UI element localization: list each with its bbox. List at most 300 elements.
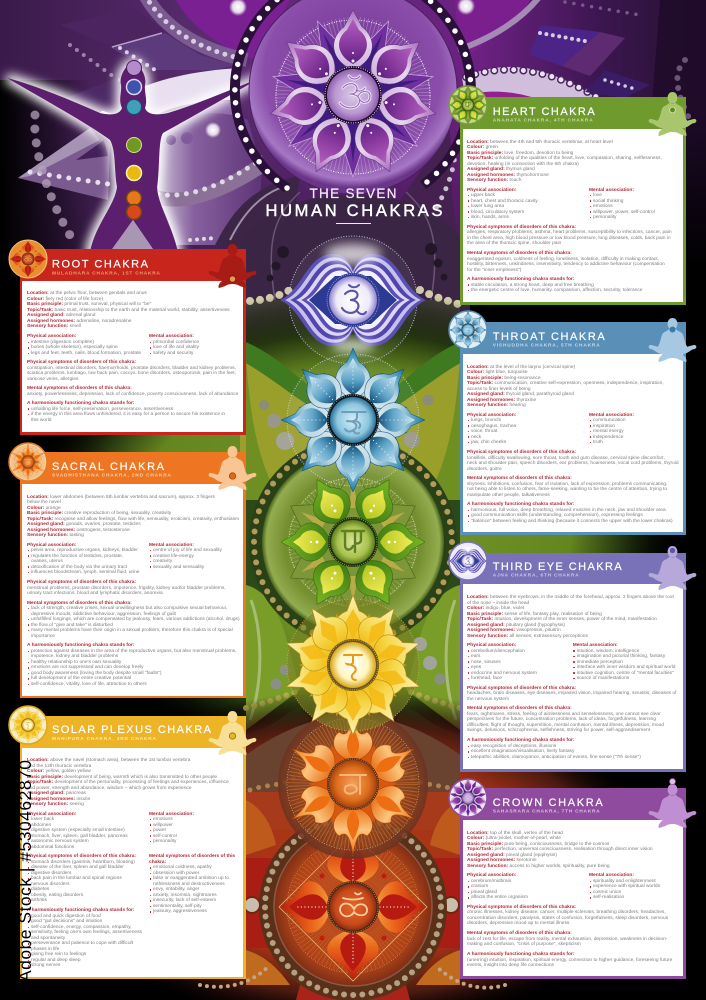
text: third eye mental symptoms: difficulties, flight of thought, superstition, mental confusion, mental illness, depression, mood [467, 723, 664, 728]
text: third eye facts: Assigned gland: pituitary gland (hypophysis) [467, 622, 565, 628]
text: throat facts: Sensory function: hearing [467, 403, 526, 408]
text: solar plexus mental symptoms: emotional coldness, apathy [153, 865, 212, 870]
text: third eye physical association [467, 642, 537, 681]
text: third eye facts: Topic/Task: intuition, development of the inner senses, power of the mind, manifestation [467, 617, 657, 622]
text: crown harmonious function [467, 952, 672, 968]
text: sacral mental association [149, 542, 222, 570]
text: solar plexus mental symptoms: Mental symptoms of disorders of this [149, 854, 235, 859]
text: solar plexus mental association: power [153, 828, 166, 833]
text: third eye facts: Sensory function: all senses, extrasensory perceptions [467, 634, 588, 638]
text: solar plexus mental association: self-control [153, 834, 177, 838]
text: solar plexus facts: and power, strength and abundance, wisdom – which grows from experience [27, 786, 192, 790]
text: root physical symptoms: constipation, intestinal disorders, haemorrhoids, prostate disorders, bladder and kidney problems, [27, 366, 236, 370]
figure with seven chakras and arms raised [7, 60, 260, 252]
text: heart physical symptoms: Physical symptoms of disorders of this chakra: [467, 224, 576, 230]
text: root physical association: bones (whole skeleton), especially spine [31, 345, 118, 350]
text: sacral mental symptoms: importance [31, 634, 55, 638]
text: heart physical symptoms: the area of the thoracic spine, shoulder pain [467, 241, 561, 246]
text: root mental association: safety and security [153, 351, 193, 356]
text: solar plexus facts: Colour: yellow, golden yellow [27, 769, 91, 774]
text: crown harmonious function: events, insight into deep life connections [467, 963, 554, 968]
text: third eye facts [467, 594, 674, 638]
text: throat harmonious function [467, 502, 673, 524]
text: heart facts: Basic principle: love, freedom, devotion to being [467, 150, 573, 156]
text: sacral physical association [27, 542, 140, 575]
text: heart mental symptoms: Mental symptoms of disorders of this chakra: [467, 251, 572, 256]
panel: root chakra [20, 249, 246, 435]
text: heart physical association: lower lung area [471, 204, 504, 209]
panel: crown chakra [460, 788, 686, 979]
text: sacral facts: Topic/Task: recognise and allow feelings, flow with life, sensuality, eroticism, creativity, enthusiasm [27, 516, 239, 522]
text: heart facts: Assigned gland: thymus gland [467, 167, 535, 172]
panel: heart chakra [460, 97, 686, 305]
icon: heart medallion [449, 86, 487, 124]
subheading: root: MULADHARA CHAKRA, 1ST CHAKRA [52, 270, 161, 276]
text: solar plexus harmonious function: phases in life [31, 947, 59, 952]
text: sacral mental symptoms [27, 600, 240, 638]
text: root facts: Topic/Task: basic trust, relationship to the earth and the material world, stability, assertiveness [27, 308, 230, 313]
text: root physical association: legs and feet, teeth, nails, blood formation, prostate [31, 351, 141, 356]
text: heart harmonious function: stable circulation, a strong heart, deep and free breathing [471, 282, 594, 288]
text: heart physical association: blood, circulatory system [471, 210, 524, 214]
panel: third eye chakra [460, 553, 686, 772]
text: heart physical association: heart, chest and thoracic cavity [471, 198, 538, 204]
panel body [463, 820, 683, 976]
text: third eye physical association: nose, sinuses [471, 660, 501, 664]
heading: sacral: SACRAL CHAKRA [52, 461, 165, 473]
text: throat mental association: independence [593, 434, 623, 440]
text: throat mental symptoms: manipulate other people, talkativeness [467, 493, 550, 498]
text: crown facts: Topic/Task: perfection, universal consciousness, realisation through direct inner vision [467, 847, 653, 852]
text: root harmonious function: if the energy in this area flows unhindered, it is easy for a person to secure his existence in [31, 412, 225, 417]
text: heart facts: Assigned hormones: thymohormone [467, 172, 549, 178]
text: root facts: Location: at the pelvic floor, between genitals and anus [27, 291, 147, 296]
text: solar plexus physical symptoms: Physical symptoms of disorders of this chakra: [27, 854, 136, 859]
text: sacral facts [27, 494, 239, 538]
text: third eye harmonious function: telepathic abilities, clairvoyance, anticipation of events, fine sense ("7th sense") [471, 755, 641, 760]
text: crown harmonious function: (unerring) intuition, inspiration, spiritual energy, connection to higher guidance, foreseeing future [467, 958, 672, 962]
text: root physical symptoms: sciatica problems, lumbago, low back pain, coccyx, bone disorders, osteoporosis, pain in the feet, [27, 371, 236, 376]
text: solar plexus physical association: Physical association: [27, 812, 76, 816]
panel: throat chakra [460, 322, 686, 535]
background: green leaf field [23, 290, 683, 760]
text: crown mental symptoms: making and confusion, "crisis of purpose", skepticism [467, 942, 581, 947]
text: solar plexus harmonious function: sensitivity, feeling one's own feelings, assertiveness [31, 930, 142, 935]
text: heart mental association: love [593, 193, 602, 198]
text: solar plexus facts: Basic principle: development of being, warmth which is also transmitted to other people [27, 774, 217, 780]
text: heart physical association [467, 188, 538, 220]
text: crown harmonious function: A harmoniously functioning chakra stands for: [467, 952, 574, 957]
text: sacral harmonious function: impotence, kidney and bladder problems [31, 654, 118, 659]
text: crown facts: Basic principle: pure being, consciousness, bridge to the cosmos [467, 842, 609, 846]
icon: meditating figure [209, 446, 256, 490]
text: solar plexus physical symptoms: back pain in the lumbar and spinal regions [31, 876, 122, 881]
text: sacral facts: Assigned hormones: oestrogens, testosterone [27, 528, 130, 532]
text: crown mental association: Mental association: [589, 873, 634, 878]
background: top-right ribbons, plates and beads [400, 0, 690, 250]
text: solar plexus mental symptoms: jealousy, aggressiveness [153, 909, 207, 914]
text: sacral mental association: sexuality and sensuality [153, 564, 204, 570]
text: sacral physical association: regulates the function of testicles, prostate, [31, 554, 123, 558]
text: throat harmonious function: A harmoniously functioning chakra stands for: [467, 502, 574, 507]
text: throat physical symptoms: disorders, goitre [467, 466, 502, 472]
text: root facts: Basic principle: primal trust, survival, physical will to "be" [27, 302, 151, 307]
text: third eye mental association: intuition, wisdom, intelligence [577, 648, 639, 654]
text: solar plexus harmonious function [27, 908, 142, 968]
text: solar plexus harmonious function: perseverance and patience to cope with difficult [31, 941, 133, 946]
text: sacral harmonious function: good body awareness (loving the body despite small "faults") [31, 671, 162, 676]
text: throat harmonious function: harmonious, full voice, deep breathing, relaxed muscles in the neck, jaw and shoulder area [471, 508, 666, 513]
icon: meditating figure [649, 778, 696, 828]
chakra: heart [249, 438, 457, 646]
subheading: throat: VISHUDDHA CHAKRA, 5TH CHAKRA [493, 343, 600, 349]
text: crown physical association: cerebrum/midbrain [471, 879, 511, 884]
panel header: medallion, title, figure [448, 310, 696, 362]
text: root mental association: primordial confidence [153, 340, 199, 345]
text: solar plexus physical symptoms [27, 854, 136, 903]
text: sacral mental symptoms: the flow of "give and take" is disturbed [31, 622, 113, 628]
text: crown physical symptoms: chronic illnesses, kidney disease, cancer, multiple sclerosis, breathing disorders, headaches, [467, 910, 666, 915]
text: heart mental symptoms [467, 250, 665, 272]
text: third eye mental symptoms: fears, nightmares, stress, feeling of aimlessness and senselessness, one cannot see clear [467, 712, 661, 717]
text: crown physical association: affects the entire organism [471, 895, 528, 900]
text: root physical association: intestine (digestion complete) [31, 340, 94, 345]
text: solar plexus harmonious function: self-confidence, energy, compassion, empathy, [31, 925, 132, 930]
text: third eye physical association: endocrine and nervous system [471, 670, 537, 676]
text: sacral physical symptoms: Physical symptoms of disorders of this chakra: [27, 580, 136, 585]
panel: solar plexus chakra [20, 716, 246, 979]
text: solar plexus physical symptoms: disease of the liver, spleen and gall bladder [31, 865, 124, 870]
text: solar plexus mental symptoms: insecurity, lack of self-esteem [153, 898, 216, 903]
text: solar plexus mental association: emotions [153, 817, 173, 822]
text: solar plexus physical association: stomach, liver, spleen, gall bladder, pancreas [31, 834, 128, 838]
icon: sacral medallion [9, 443, 47, 481]
text: heart mental association: emotions [593, 204, 613, 209]
text: third eye mental association [573, 642, 676, 681]
text: solar plexus physical symptoms: obesity, eating disorders [31, 893, 83, 898]
text: crown mental symptoms [467, 931, 667, 948]
text: third eye mental association: source of manifestations [577, 676, 629, 681]
text: heart mental symptoms: exaggerated egoism, coldness of feeling, loneliness, isolation, difficulty in making contact, [467, 256, 659, 262]
text: crown mental association: spirituality and enlightenment [593, 879, 656, 884]
text: heart facts: Topic/Task: unfolding of the qualities of the heart, love, compassion, sharing, selflessness, [467, 156, 662, 161]
text: third eye mental association: immediate perception [577, 660, 623, 664]
text: heart physical symptoms: in the chest area, high blood pressure or low blood pressure, lung diseases, colds, back pain in [467, 236, 671, 240]
text: throat facts: Basic principle: being-resonance [467, 376, 541, 380]
text: heart mental association: Mental association: [589, 188, 634, 192]
icon: crown medallion [448, 778, 488, 818]
panel header: medallion, title, figure [8, 240, 256, 288]
heading: solar plexus: SOLAR PLEXUS CHAKRA [52, 724, 212, 736]
text: solar plexus physical association: abdominal functions [31, 844, 74, 850]
text: sacral physical symptoms: menstrual problems, prostate disorders, impotence, frigidity, kidney and/or bladder problems, [27, 586, 226, 590]
text: third eye mental symptoms: perspectives for the future, concentration problems, lack of ideas, forgetfulness, learning [467, 717, 656, 722]
text: throat mental symptoms: not being able to listen to others, fame-seeking, wanting to be the centre of attention, trying to [467, 487, 667, 492]
text: third eye facts: Assigned hormones: vasopressin, pituitrin [467, 628, 561, 633]
text: throat physical association: neck [471, 434, 481, 440]
text: heart mental association [589, 188, 655, 220]
icon: meditating figure [209, 244, 256, 288]
text: third eye mental association: imagination and pictorial thinking, fantasy [577, 654, 665, 659]
text: third eye mental association: intuitive cognition, centre of "mental faculties" [577, 670, 674, 676]
text: crown physical symptoms: disorders, depressive mood up to mental illness [467, 921, 569, 926]
text: heart physical association: Physical association: [467, 188, 516, 192]
heading: heart: HEART CHAKRA [493, 106, 595, 118]
text: solar plexus physical symptoms: arthritis [31, 898, 47, 903]
text: heart physical association: skin, hands, arms [471, 215, 509, 220]
text: heart physical association: upper back [471, 193, 495, 198]
text: heart mental symptoms: for the "inner emptiness") [467, 268, 521, 272]
panel body [22, 281, 243, 432]
text: sacral facts: Assigned gland: gonads, ovaries, prostate, testicles [27, 522, 141, 527]
text: throat mental association: communication [593, 418, 626, 423]
subheading: heart: ANAHATA CHAKRA, 4TH CHAKRA [493, 118, 593, 124]
text: root facts: Assigned gland: adrenal gland [27, 313, 95, 318]
text: solar plexus physical symptoms: diabetes [31, 887, 49, 892]
text: heart facts: devotion, healing (in connection with the 6th chakra) [467, 162, 579, 166]
text: throat facts [467, 364, 664, 408]
text: heart physical symptoms: allergies, respiratory problems, asthma, heart problems, susceptibility to infections, cancer, pain [467, 230, 672, 235]
text: sacral physical association: pelvis area, reproductive organs, kidneys, bladder [31, 548, 138, 553]
heading: throat: THROAT CHAKRA [493, 331, 605, 343]
text: root physical association: Physical association: [27, 334, 76, 339]
text: sacral harmonious function: emotions are not suppressed and can develop freely [31, 665, 144, 670]
text: third eye harmonious function: excellent imagination/visualisation, lively fantasy [471, 749, 574, 754]
text: sacral physical symptoms: urinary tract infections, blood and lymphatic disorders, anorexia [27, 591, 163, 596]
title: HUMAN CHAKRAS [266, 202, 442, 220]
icon: root medallion [9, 240, 47, 278]
panel body [22, 748, 243, 977]
text: throat physical symptoms: tonsillitis, difficulty swallowing, sore throat, tooth and gum disease, cervical spine discomfort, [467, 456, 665, 460]
text: root facts: Sensory function: smell [27, 324, 81, 329]
text: root physical symptoms [27, 360, 236, 382]
chakra: third eye [280, 236, 426, 364]
text: root physical association [27, 334, 141, 356]
text: third eye mental symptoms [467, 706, 664, 734]
text: solar plexus mental symptoms: sentimentality, self-pity [153, 904, 202, 909]
text: throat harmonious function: "balance" between feeling and thinking (because it connects the upper with the lower chakras) [471, 519, 673, 524]
text: throat facts: Assigned gland: thyroid gland, parathyroid gland [467, 392, 574, 397]
text: third eye physical association: ears [471, 654, 480, 659]
text: solar plexus harmonious function: A harmoniously functioning chakra stands for: [27, 908, 134, 913]
text: root facts: Assigned hormones: adrenaline, noradrenaline [27, 319, 131, 324]
text: throat facts: Assigned hormones: thyroxine [467, 398, 536, 402]
chakra: throat [281, 348, 425, 492]
text: crown mental association: cosmic union [593, 890, 621, 895]
text: solar plexus harmonious function: good and quick digestion of food [31, 914, 101, 919]
text: third eye mental association: interface with inner wisdom and spiritual world [577, 665, 676, 670]
text: sacral physical association: influences bloodstream, lymph, seminal fluid, urine [31, 570, 140, 575]
text: sacral harmonious function: self-confidence, vitality, love of life, attraction to others [31, 682, 147, 687]
text: root harmonious function: unfolding life force, self-preservation, perseverance, assertiveness [31, 406, 173, 412]
text: third eye physical association: forehead, face [471, 676, 502, 681]
text: solar plexus facts: Sensory function: seeing [27, 802, 84, 807]
text: sacral harmonious function: A harmoniously functioning chakra stands for: [27, 643, 134, 648]
text: solar plexus mental association: personality [153, 839, 176, 844]
text: solar plexus mental association: willpower [153, 822, 173, 828]
background: central dark purple zone [240, 192, 470, 395]
watermark: stock id: Adobe Stock | #530462870 [15, 760, 35, 982]
text: throat physical association: oesophagus, trachea [471, 424, 516, 428]
text: sacral physical symptoms [27, 580, 226, 596]
text: throat physical symptoms: neck and shoulder pain, speech disorders, ear problems, hoarseness, vocal cord problems, thyroid [467, 461, 679, 466]
text: solar plexus mental symptoms: false or exaggerated ambition up to [153, 876, 229, 881]
text: crown physical association [467, 873, 528, 901]
icon: meditating figure [649, 92, 696, 136]
text: throat mental symptoms: shyness, inhibitions, confusion, fear of isolation, lack of expression, problems communicating, [467, 482, 667, 487]
text: crown physical symptoms: Physical symptoms of disorders of this chakra: [467, 904, 576, 910]
text: sacral mental symptoms: Mental symptoms of disorders of this chakra: [27, 600, 132, 606]
text: throat physical symptoms [467, 450, 679, 472]
text: solar plexus harmonious function: good "gut decisions" and intuition [31, 919, 102, 924]
icon: meditating figure [209, 711, 256, 755]
text: throat mental association: Mental association: [589, 412, 634, 418]
text: solar plexus facts [27, 758, 229, 807]
text: sacral harmonious function: healthy relationship to one's own sexuality [31, 660, 121, 665]
text: crown facts: Sensory function: access to higher worlds, spirituality, pure being [467, 864, 610, 868]
text: sacral mental symptoms: lack of strength, creative crises, sexual unwillingness but also compulsive sexual behaviour, [31, 606, 227, 611]
text: solar plexus physical association: abdomen [31, 822, 51, 828]
text: throat mental association: mental energy [593, 429, 624, 434]
chakra: sacral [278, 709, 428, 859]
text: solar plexus mental symptoms: envy, irritability, anger [153, 887, 199, 892]
text: sacral physical association: ovaries, uterus [31, 559, 63, 564]
text: third eye facts: Location: between the eyebrows, in the middle of the forehead, approx. 2 fingers above the root [467, 595, 674, 600]
text: solar plexus physical symptoms: stomach disorders (gastritis, heartburn, bloating) [31, 860, 135, 865]
text: sacral facts: below the navel [27, 500, 61, 505]
text: root harmonious function: A harmoniously functioning chakra stands for: [27, 401, 134, 406]
panel header: medallion, title, figure [448, 85, 696, 136]
text: third eye physical symptoms [467, 686, 676, 702]
text: solar plexus physical association: autonomic nervous system [31, 839, 89, 844]
text: crown mental association [589, 873, 660, 901]
text: heart mental association: willpower, power, self-control [593, 210, 655, 214]
text: solar plexus facts: Assigned gland: pancreas [27, 791, 86, 796]
text: sacral physical association: Physical association: [27, 542, 76, 548]
text: sacral mental association: creative life-energy [153, 554, 194, 558]
text: heart mental symptoms: hostility, bitterness, unkindness, insensitivity, tendency to addictive behaviour (compensation [467, 262, 665, 267]
panel body [22, 484, 243, 696]
text: sacral physical association: detoxification of the body via the urinary tract [31, 564, 127, 570]
chakra: root [259, 813, 447, 1000]
subheading: solar plexus: MANIPURA CHAKRA, 3RD CHAKRA [52, 736, 157, 742]
text: sacral mental association: Mental association: [149, 542, 194, 548]
text: throat physical association: lungs, bronchi [471, 418, 501, 423]
text: solar plexus harmonious function: regular and deep sleep [31, 958, 81, 963]
text: throat mental association: truth [593, 440, 603, 445]
heading: root: ROOT CHAKRA [52, 258, 149, 270]
text: crown facts: Assigned hormones: serotonin [467, 858, 536, 863]
text: third eye physical association: Physical association: [467, 643, 516, 648]
text: third eye physical association: eyes [471, 665, 481, 670]
text: solar plexus physical symptoms: digestive disorders [31, 871, 71, 876]
text: third eye harmonious function: easy recognition of deceptions, illusions [471, 744, 556, 749]
background: top-left ribbons, plates and beads [18, 0, 303, 245]
text: crown mental symptoms: lack of zest for life, escape from reality, mental exhaustion, depression, weakness in decision- [467, 937, 667, 942]
text: third eye harmonious function: A harmoniously functioning chakra stands for: [467, 738, 574, 743]
background: upper purple field [0, 0, 706, 270]
text: solar plexus physical symptoms: nervous disorders [31, 882, 70, 887]
panel body [463, 129, 683, 302]
text: crown physical association: Physical association: [467, 873, 516, 878]
heading: third eye: THIRD EYE CHAKRA [493, 561, 622, 573]
text: third eye facts: of the nose – inside the head [467, 600, 529, 606]
text: third eye facts: Basic principle: sense of life, fantasy play, realisation of being [467, 612, 602, 616]
chakra: crown [235, 0, 471, 194]
text: root facts [27, 290, 230, 329]
text: crown facts: Location: top of the skull, vertex of the head [467, 830, 563, 836]
text: sacral facts: Basic principle: creative reproduction of being, sexuality, creativity [27, 511, 171, 516]
text: solar plexus physical association: lower back [31, 817, 54, 822]
text: crown facts: Colour: (ultra-)violet, mother-of-pearl, white [467, 836, 561, 841]
heading: crown: CROWN CHAKRA [493, 797, 603, 809]
text: third eye mental symptoms: swings, delusions, schizophrenia, selfishness, striving for power, self-aggrandisement [467, 728, 650, 733]
icon: meditating figure [649, 318, 696, 362]
title [266, 186, 442, 224]
text: solar plexus facts: and the 12th thoracic vertebra [27, 764, 91, 768]
text: solar plexus mental symptoms: anxiety, insomnia, nightmares [153, 893, 217, 898]
icon: meditating figure [649, 546, 696, 590]
text: heart facts: Location: between the 4th and 5th thoracic vertebrae, at heart level [467, 140, 613, 144]
panel: sacral chakra [20, 452, 246, 698]
text: throat harmonious function: good communication skills (understanding, comprehension), expressing feelings [471, 513, 643, 518]
text: third eye physical association: cerebellum/diencephalon [471, 648, 525, 654]
text: crown physical symptoms [467, 904, 668, 926]
text: solar plexus physical association [27, 812, 128, 850]
text: solar plexus facts: Topic/Task: development of the personality, processing of feelings and experiences, influence [27, 780, 229, 785]
text: third eye facts: Colour: indigo, blue, violet [467, 606, 524, 611]
icon: solar plexus medallion [9, 706, 47, 744]
text: root physical symptoms: varicose veins, allergies [27, 376, 78, 382]
text: solar plexus physical association: digestive system (especially small intestine) [31, 828, 125, 833]
icon: third eye medallion [449, 542, 487, 580]
text: third eye physical symptoms: the nervous system [467, 696, 509, 702]
panel header: medallion, title, figure [8, 705, 256, 756]
text: heart harmonious function [467, 276, 643, 293]
icon: throat medallion [449, 311, 487, 349]
text: sacral mental association: centre of joy of life and sexuality [153, 548, 222, 553]
text: solar plexus facts: Location: above the navel (stomach area), between the 1st lumbar vertebra [27, 758, 190, 763]
text: crown physical symptoms: concentration disorders, paralysis, states of confusion, forgetfulness, sleep disorders, nervous [467, 916, 668, 920]
text: sacral facts: Colour: orange [27, 506, 61, 510]
text: sacral harmonious function [27, 642, 236, 687]
text: solar plexus mental symptoms [149, 854, 235, 914]
text: crown physical association: cranium [471, 884, 488, 889]
subheading: third eye: AJNA CHAKRA, 6TH CHAKRA [493, 573, 579, 579]
text: sacral facts: Sensory function: tasting [27, 533, 84, 538]
text: solar plexus mental symptoms: obsession with power [153, 871, 199, 876]
text: third eye mental association: Mental association: [573, 643, 618, 648]
text: crown facts [467, 830, 653, 869]
text: root harmonious function [27, 400, 225, 422]
text: solar plexus harmonious function: and spontaneity [31, 936, 65, 941]
text: throat mental symptoms: Mental symptoms of disorders of this chakra: [467, 476, 572, 481]
text: root physical symptoms: Physical symptoms of disorders of this chakra: [27, 360, 136, 365]
text: sacral harmonious function: full development of the entire creative potential [31, 676, 131, 681]
text: throat facts: Topic/Task: communication, creative self-expression, openness, independence, inspiration, [467, 381, 664, 386]
text: throat facts: access to finer levels of being [467, 386, 531, 392]
text: crown mental symptoms: Mental symptoms of disorders of this chakra: [467, 931, 572, 936]
text: root mental association: love of life and vitality [153, 345, 199, 350]
text: throat physical association [467, 412, 516, 445]
background: brown and red lower field [43, 690, 663, 1000]
text: root mental symptoms: Mental symptoms of disorders of this chakra: [27, 386, 132, 391]
text: heart facts [467, 140, 662, 183]
text: solar plexus mental association: Mental association: [149, 812, 194, 816]
text: sacral mental symptoms: many mental problems have their origin in a sexual problem, therefore this chakra is of special [31, 628, 233, 633]
title: THE SEVEN [310, 186, 396, 201]
text: crown mental association: experience with spiritual worlds [593, 884, 660, 889]
